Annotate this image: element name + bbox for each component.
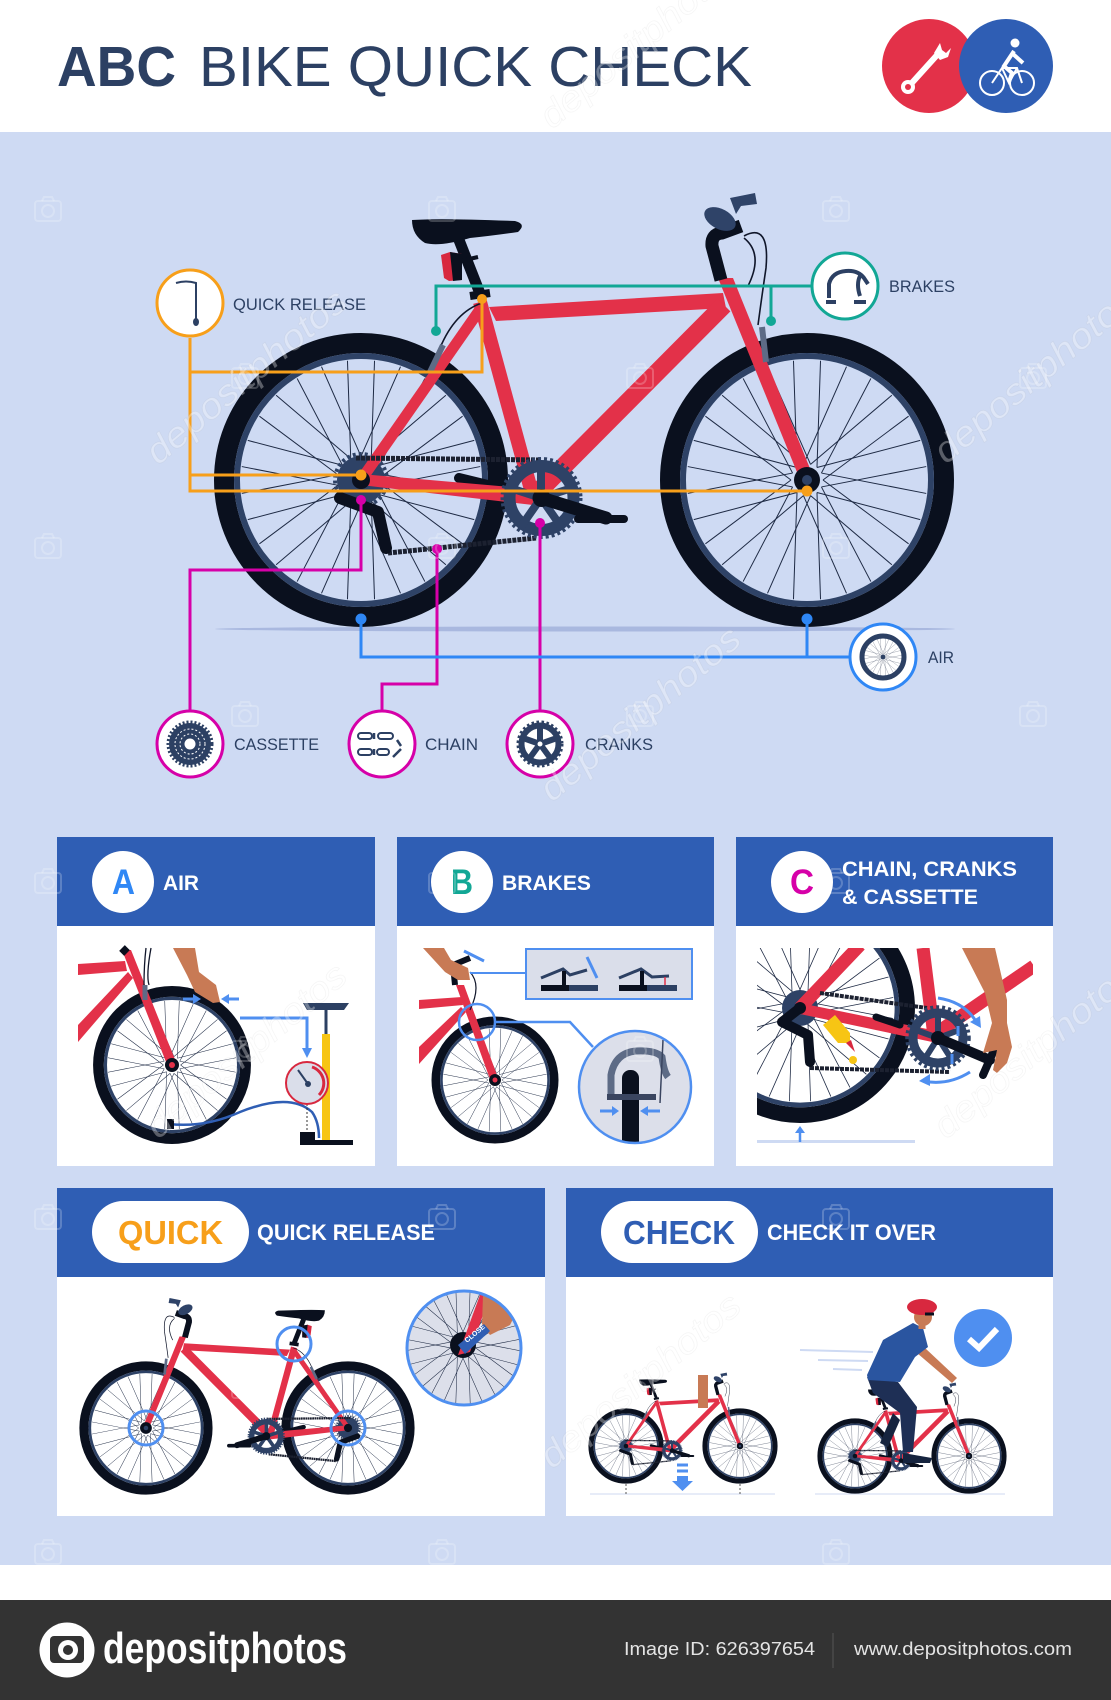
callout: cassette: CASSETTE — [234, 735, 319, 754]
callout lines: quick release — [190, 294, 812, 496]
icon: wrench badge — [882, 19, 976, 113]
callout: brakes: BRAKES — [889, 277, 955, 296]
rider on bike — [820, 1299, 1004, 1491]
panel: quick release: QUICK RELEASE — [257, 1220, 435, 1245]
panel: quick release: QUICK — [118, 1214, 223, 1251]
footer website: www.depositphotos.com — [853, 1638, 1072, 1659]
panel: C chain, cranks and cassette: CHAIN, CRANKS — [842, 858, 1017, 881]
panel: B brakes: BRAKES — [502, 872, 591, 895]
panel: A air — [57, 837, 375, 1166]
speed lines — [800, 1350, 873, 1370]
footer image id: Image ID: 626397654 — [624, 1638, 815, 1659]
panel: A air: A — [112, 863, 135, 902]
pump and hose — [167, 1003, 353, 1145]
callout: brakes — [812, 253, 955, 319]
rotation arrows — [919, 998, 981, 1086]
icon: cyclist badge — [959, 19, 1053, 113]
footer bar — [0, 1600, 1111, 1700]
bike drop test — [591, 1373, 775, 1494]
footer logo — [40, 1622, 347, 1678]
callout lines: air — [356, 614, 849, 657]
double arrow — [464, 951, 484, 961]
icon: check mark — [954, 1309, 1012, 1367]
main bike illustration — [224, 193, 944, 617]
callout: chain: CHAIN — [425, 735, 478, 754]
panel: B brakes — [397, 837, 714, 1166]
callout: air: AIR — [928, 648, 954, 667]
watermarks: depositphotos — [137, 280, 355, 472]
inset: lever close-up: CLOSE — [464, 1323, 487, 1345]
panel: check it over: CHECK IT OVER — [767, 1220, 936, 1245]
squeeze arrows and line to gauge — [183, 994, 312, 1058]
hand on lever — [423, 948, 470, 980]
callout: quick release: QUICK RELEASE — [233, 295, 366, 314]
panel: check it over — [566, 1188, 1053, 1516]
hand on tyre — [173, 948, 220, 1003]
wheel with frame — [419, 958, 554, 1139]
highlight rings — [129, 1327, 365, 1445]
oil bottle — [823, 1015, 857, 1064]
callout lines: cassette, chain, cranks — [190, 495, 545, 710]
panel: C chain, cranks and cassette: & CASSETTE — [842, 886, 978, 909]
callout lines: brakes — [431, 286, 811, 336]
title: BIKE QUICK CHECK — [199, 35, 752, 99]
panel: C chain, cranks and cassette — [736, 837, 1053, 1166]
panel: B brakes: B — [451, 863, 473, 902]
inset: brake caliper — [579, 1031, 691, 1150]
watermarks: depositphotos — [531, 1284, 749, 1476]
watermarks — [137, 0, 1111, 1476]
callout: cassette — [157, 711, 319, 777]
ground and up arrow — [757, 1126, 915, 1143]
drivetrain close-up — [757, 948, 1033, 1123]
callout: quick release — [157, 270, 366, 336]
panel: C chain, cranks and cassette: C — [790, 863, 814, 902]
magnifier ring and line — [459, 1004, 593, 1047]
callout: cranks — [507, 711, 653, 777]
callout: cranks: CRANKS — [585, 735, 653, 754]
watermarks: depositphotos — [137, 954, 355, 1146]
watermarks: depositphotos — [531, 617, 749, 809]
ground shadow — [215, 626, 955, 632]
watermark camera icons — [35, 197, 1046, 1564]
callout: chain — [349, 711, 478, 777]
panel: check it over: CHECK — [623, 1214, 735, 1251]
callout: air — [850, 624, 954, 690]
panel: A air: AIR — [163, 872, 199, 895]
bike — [84, 1298, 410, 1490]
inset: lever close-up — [406, 1290, 522, 1406]
title: ABC — [57, 35, 176, 99]
footer logo: depositphotos — [103, 1624, 347, 1673]
wheel with frame — [78, 948, 246, 1139]
inset: brake levers — [470, 949, 692, 999]
ground lines — [590, 1493, 1005, 1495]
pressure gauge — [286, 1062, 328, 1104]
panel: quick release — [57, 1188, 545, 1516]
